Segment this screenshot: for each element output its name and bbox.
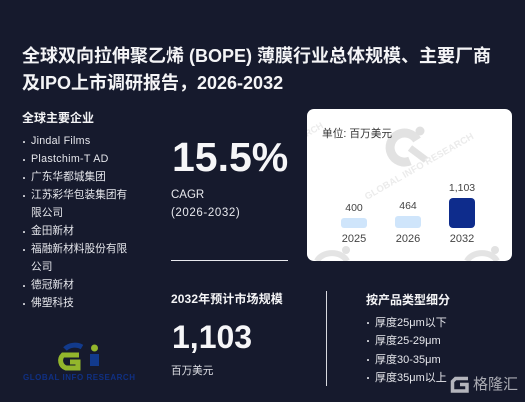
company list: 佛塑科技 [31,297,74,309]
watermark: Gelonghui logo [450,376,518,393]
bar 2025: 2025 [342,233,366,245]
panel: 2032 forecast market size [171,292,283,377]
icon: Global Info Research logo [23,342,135,382]
segment list [367,316,447,384]
company list: 江苏彩华包装集团有 [31,189,127,201]
market size unit: 百万美元 [171,365,213,377]
company list [23,135,127,309]
panel: bar chart card [307,109,512,261]
segment list: 厚度35μm以上 [375,372,447,384]
company list: 金田新材 [31,225,74,237]
heading: segmentation: 按产品类型细分 [366,293,450,307]
heading: forecast: 2032年预计市场规模 [171,292,283,306]
watermark [307,120,500,261]
icon: G logo [450,376,469,393]
panel: CAGR [171,134,288,261]
panel: segmentation by product type [366,293,450,384]
company list: 广东华都城集团 [31,171,106,183]
company list: Plastchim-T AD [31,153,109,165]
segment list: 厚度25-29μm [375,335,441,347]
brand name: 格隆汇 [473,376,518,393]
CAGR value: 15.5% [172,134,288,180]
bar 2025 [341,202,367,245]
company list: 公司 [31,261,52,273]
bar 2032: 1,103 [449,182,475,194]
company list: 限公司 [31,207,63,219]
bar chart [341,182,475,245]
CAGR label: CAGR [171,189,204,201]
title [22,46,491,92]
heading: companies: 全球主要企业 [22,111,94,125]
bar 2032: 2032 [450,233,474,245]
unit label: 单位: 百万美元 [322,128,392,140]
company list: 德冠新材 [31,279,74,291]
icon: Global Info Research logo: GLOBAL INFO RESEARCH [23,373,135,382]
title: 及IPO上市调研报告，2026-2032 [22,72,283,92]
company list: 福融新材料股份有限 [31,243,127,255]
watermark: GLOBAL INFO RESEARCH [363,131,476,203]
title: 全球双向拉伸聚乙烯 (BOPE) 薄膜行业总体规模、主要厂商 [22,46,491,66]
vertical divider [326,291,327,386]
bar 2032 [449,182,475,245]
panel: global key companies [22,111,127,309]
CAGR label [171,189,240,219]
segment list: 厚度30-35μm [375,354,441,366]
bar 2025: 400 [345,202,363,214]
segment list: 厚度25μm以下 [375,317,447,329]
CAGR label: (2026-2032) [171,207,240,219]
bar 2026 [395,200,421,245]
bar 2026: 464 [399,200,417,212]
divider [171,260,288,261]
bar 2026: 2026 [396,233,420,245]
company list: Jindal Films [31,135,90,147]
market size value: 1,103 [172,319,252,355]
